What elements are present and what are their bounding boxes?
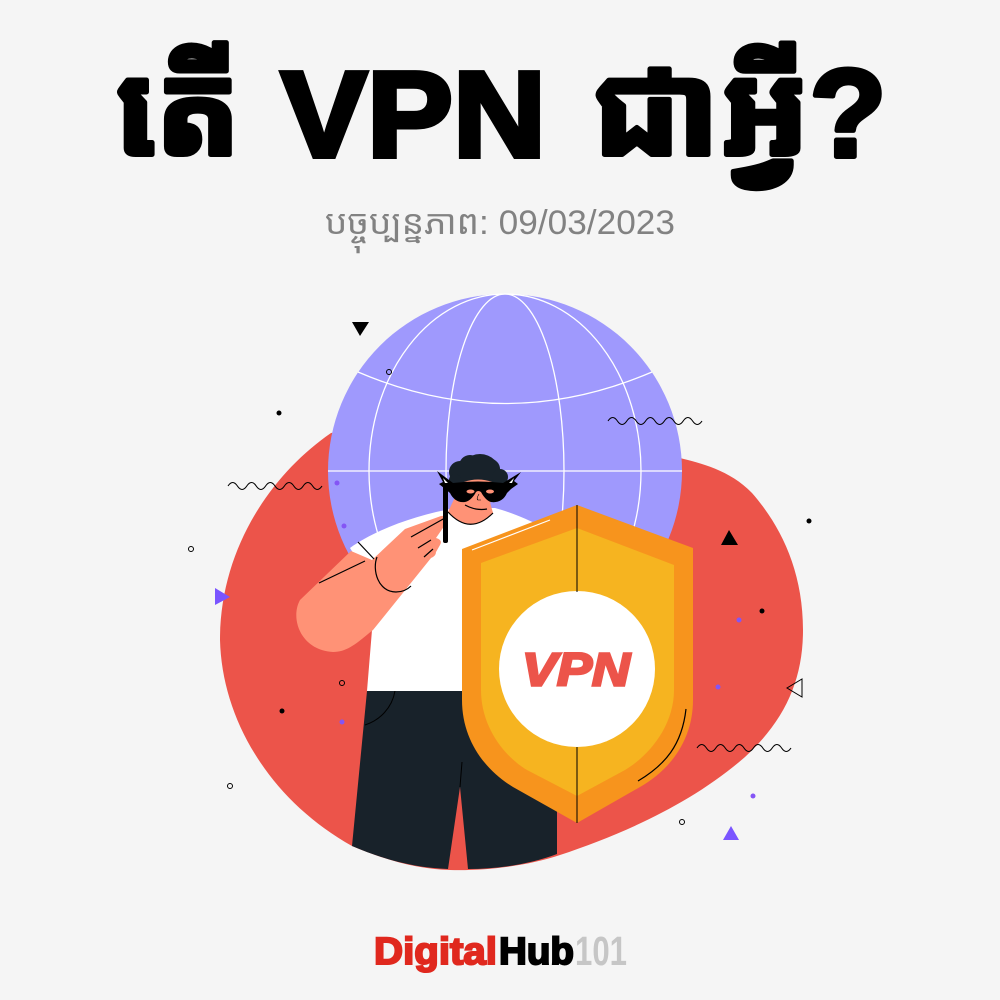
illustration [188, 294, 812, 870]
globe [328, 294, 682, 648]
red blob background [220, 400, 803, 870]
logo: Digital [374, 931, 497, 973]
title: ? [810, 44, 886, 184]
title: តើ [115, 40, 241, 182]
logo: 101 [575, 928, 627, 974]
trousers [352, 691, 557, 869]
hair [449, 454, 508, 496]
shirt [350, 508, 545, 691]
shield [462, 505, 693, 823]
mask [437, 471, 521, 502]
mask stick [443, 483, 448, 543]
logo: Hub [499, 931, 574, 973]
neck [448, 495, 493, 524]
face [462, 480, 492, 509]
title [115, 40, 886, 189]
logo [374, 928, 627, 974]
subtitle: update date: បច្ចុប្បន្នភាព: 09/03/2023 [325, 204, 675, 253]
title: VPN [281, 46, 546, 182]
decorative confetti [188, 322, 812, 840]
title: ជាអ្វី [591, 40, 810, 189]
arm and hand [296, 516, 447, 652]
shield label: VPN [522, 644, 631, 696]
person [296, 454, 557, 869]
